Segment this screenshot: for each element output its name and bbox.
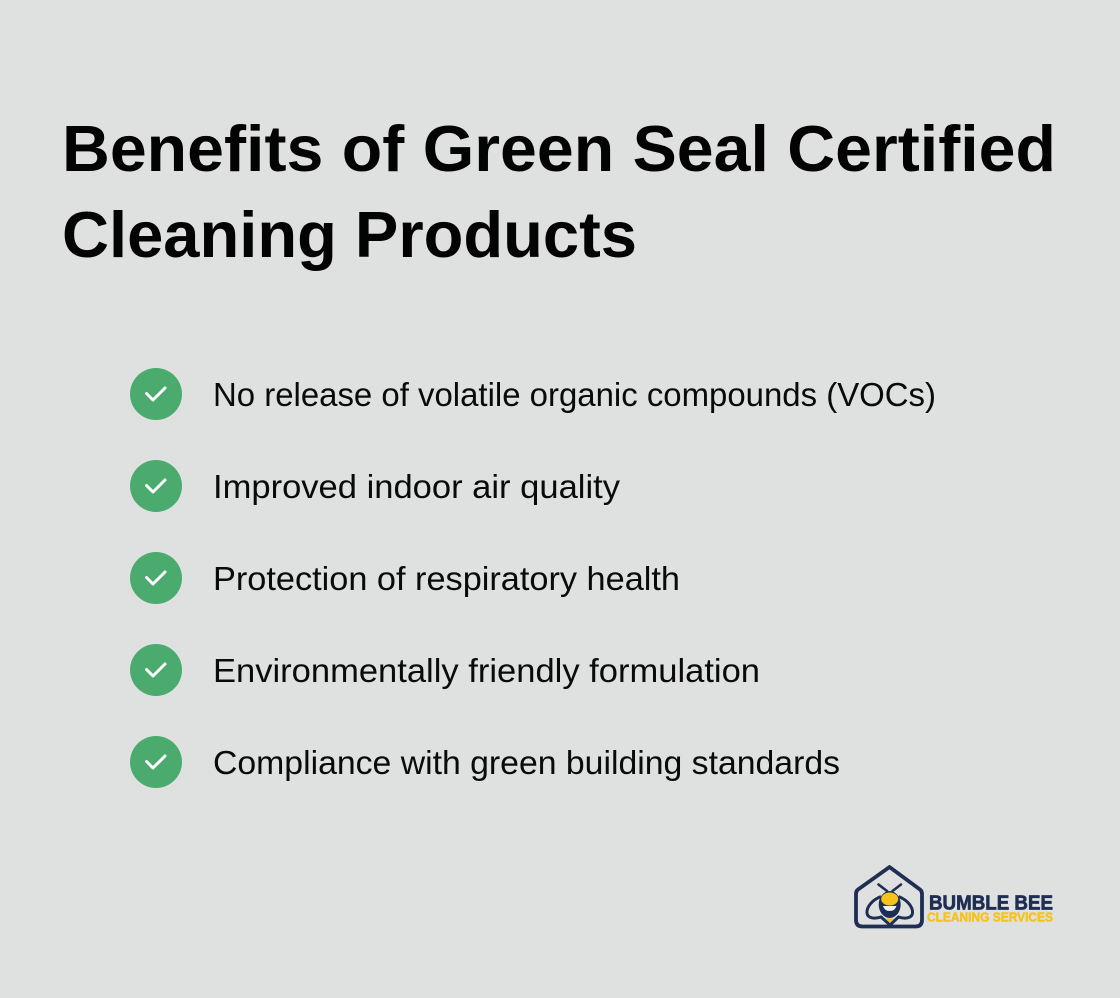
title: Benefits of Green Seal Certified [62,112,1056,185]
list item: air quality [130,460,621,512]
list item: green building: Compliance with green building standards [213,744,840,781]
logo: Bumble Bee Cleaning Services: BUMBLE BEE [929,892,1053,914]
benefits list [130,368,936,788]
list item: green building [130,736,840,788]
logo: Bumble Bee Cleaning Services [856,867,1053,926]
list item: respiratory health [130,552,680,604]
list item: formulation [130,644,760,696]
list item: formulation: Environmentally friendly formulation [213,652,760,689]
list item: VOCs: No release of volatile organic compounds (VOCs) [213,376,936,413]
list item: respiratory health: Protection of respiratory health [213,560,680,597]
logo: Bumble Bee Cleaning Services: CLEANING SERVICES [927,910,1053,924]
list item: VOCs [130,368,936,420]
title: Cleaning Products [62,198,637,271]
title [62,112,1056,271]
icon: house with bee [856,867,922,926]
list item: air quality: Improved indoor air quality [213,468,621,505]
